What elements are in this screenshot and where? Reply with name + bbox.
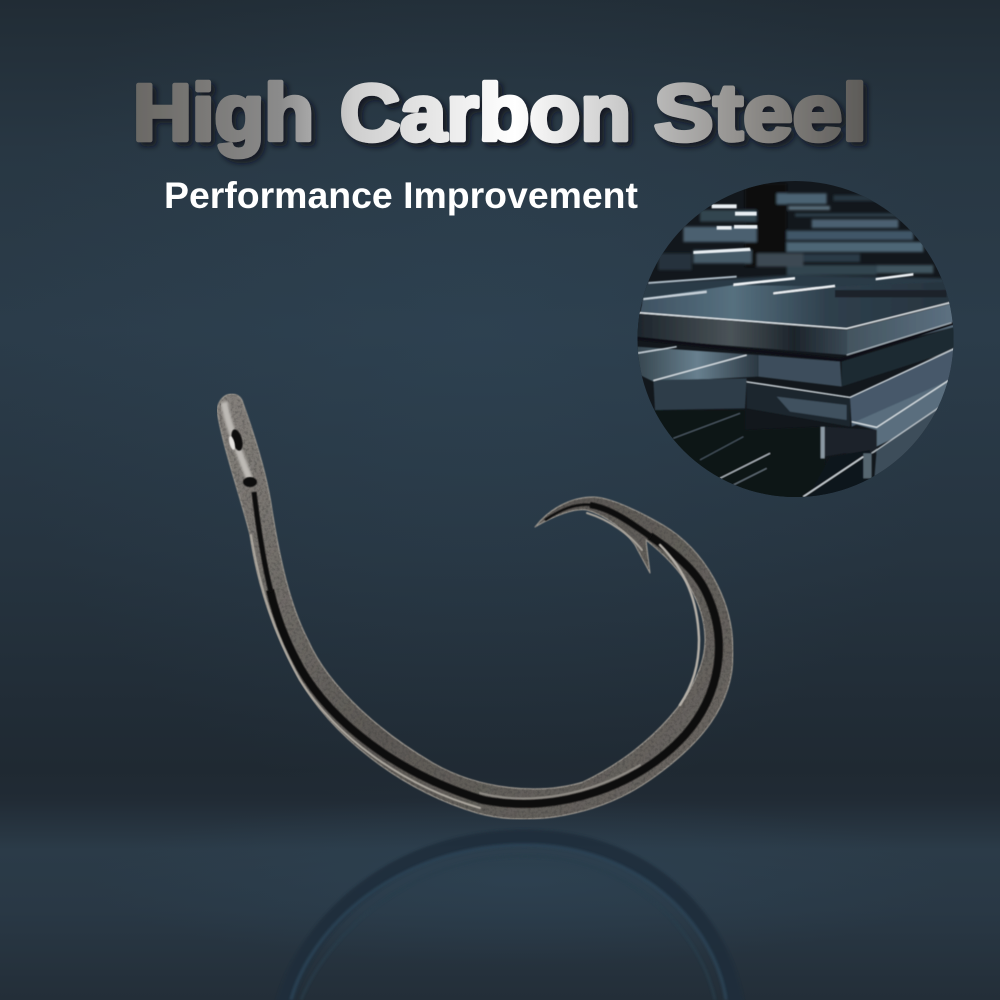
dark centre stripe — [270, 536, 719, 804]
fishing hook — [217, 394, 733, 819]
circular photo: stacked steel plates — [630, 170, 960, 505]
hook body — [217, 394, 733, 819]
thin stripe on shank and point — [254, 492, 651, 592]
hook reflection on floor — [283, 838, 736, 1000]
subtitle: Performance Improvement: Performance Improvement — [164, 175, 638, 216]
highlight lines — [251, 513, 699, 808]
blurred background bars — [640, 183, 950, 303]
stacked plates — [637, 273, 955, 505]
title: High Carbon Steel: High — [133, 68, 314, 157]
title: High Carbon Steel — [133, 68, 867, 157]
hook eye — [224, 402, 257, 487]
title: High Carbon Steel: Steel — [654, 68, 867, 157]
white bar highlights — [693, 204, 757, 254]
title: High Carbon Steel: Carbon — [340, 68, 631, 157]
